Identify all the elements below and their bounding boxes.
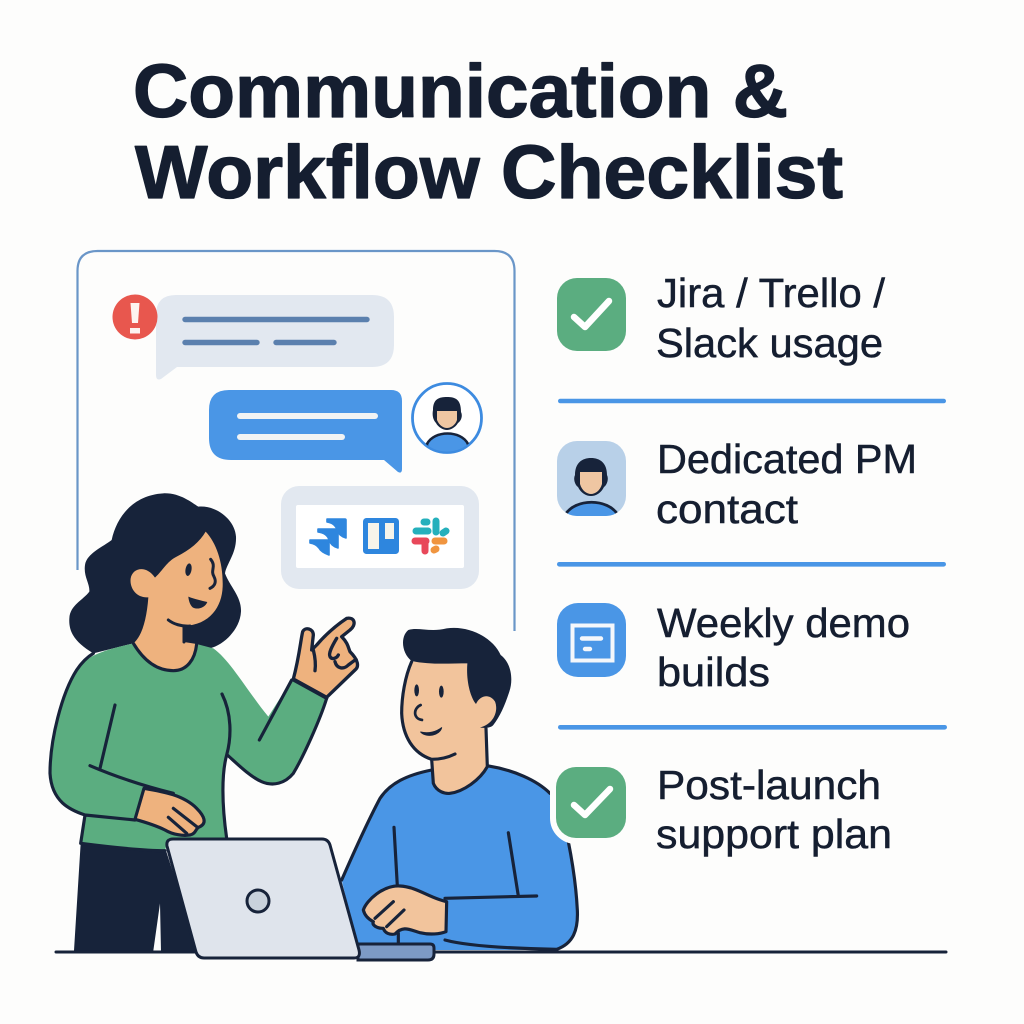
- item label: Jira / Trello /: [657, 270, 886, 316]
- item label: Weekly demo: [657, 600, 910, 646]
- item label: Post-launch: [657, 762, 881, 808]
- infographic canvas: [48, 62, 948, 962]
- icon: PM avatar in circle: [412, 384, 482, 460]
- man face and neck: [402, 662, 496, 793]
- divider: [557, 562, 946, 567]
- icon: PM avatar: [557, 441, 626, 516]
- icon: blue demo window: [557, 603, 626, 677]
- chat bubble: incoming grey message: [156, 295, 394, 380]
- woman pointing hand: [293, 618, 358, 697]
- woman hair: [69, 493, 241, 653]
- woman face and neck: [131, 532, 223, 671]
- panel: chat window frame: [78, 251, 514, 631]
- checklist item: Post-launch support plan: [556, 762, 892, 857]
- woman left hand: [135, 788, 204, 835]
- divider: [558, 399, 946, 403]
- item label: Dedicated PM: [657, 436, 917, 482]
- man hair: [403, 628, 511, 728]
- divider: [558, 725, 947, 730]
- item label: Slack usage: [656, 320, 883, 366]
- item label: [657, 600, 910, 695]
- checklist item: Dedicated PM contact: [557, 441, 914, 524]
- figure: woman in green sweater: [50, 493, 358, 952]
- checklist item: Weekly demo builds: [557, 600, 910, 695]
- chat bubble: outgoing blue message: [209, 390, 402, 473]
- woman pants: [74, 843, 198, 952]
- panel: tool logos card: [281, 486, 479, 589]
- icon: Trello logo: [363, 518, 399, 554]
- title: Workflow Checklist: [135, 130, 843, 214]
- checklist item: Jira / Trello / Slack usage: [557, 270, 886, 366]
- title: Communication &: [133, 49, 788, 133]
- woman sweater: [50, 643, 327, 851]
- icon: Slack logo: [415, 521, 446, 551]
- item label: support plan: [656, 811, 892, 857]
- item label: builds: [657, 649, 770, 695]
- title: [133, 49, 843, 214]
- figure: man in blue sweater: [342, 628, 577, 950]
- man sweater: [342, 766, 577, 950]
- icon: Jira logo: [310, 519, 346, 555]
- item label: [656, 436, 917, 532]
- item label: contact: [656, 486, 799, 532]
- icon: green check with halo: [556, 767, 626, 838]
- man hand: [363, 886, 447, 934]
- icon: green check: [557, 278, 626, 351]
- item label: [656, 270, 886, 366]
- item label: [656, 762, 892, 857]
- ground line: [56, 950, 946, 954]
- laptop: [167, 839, 434, 960]
- icon: red alert badge: [112, 294, 158, 340]
